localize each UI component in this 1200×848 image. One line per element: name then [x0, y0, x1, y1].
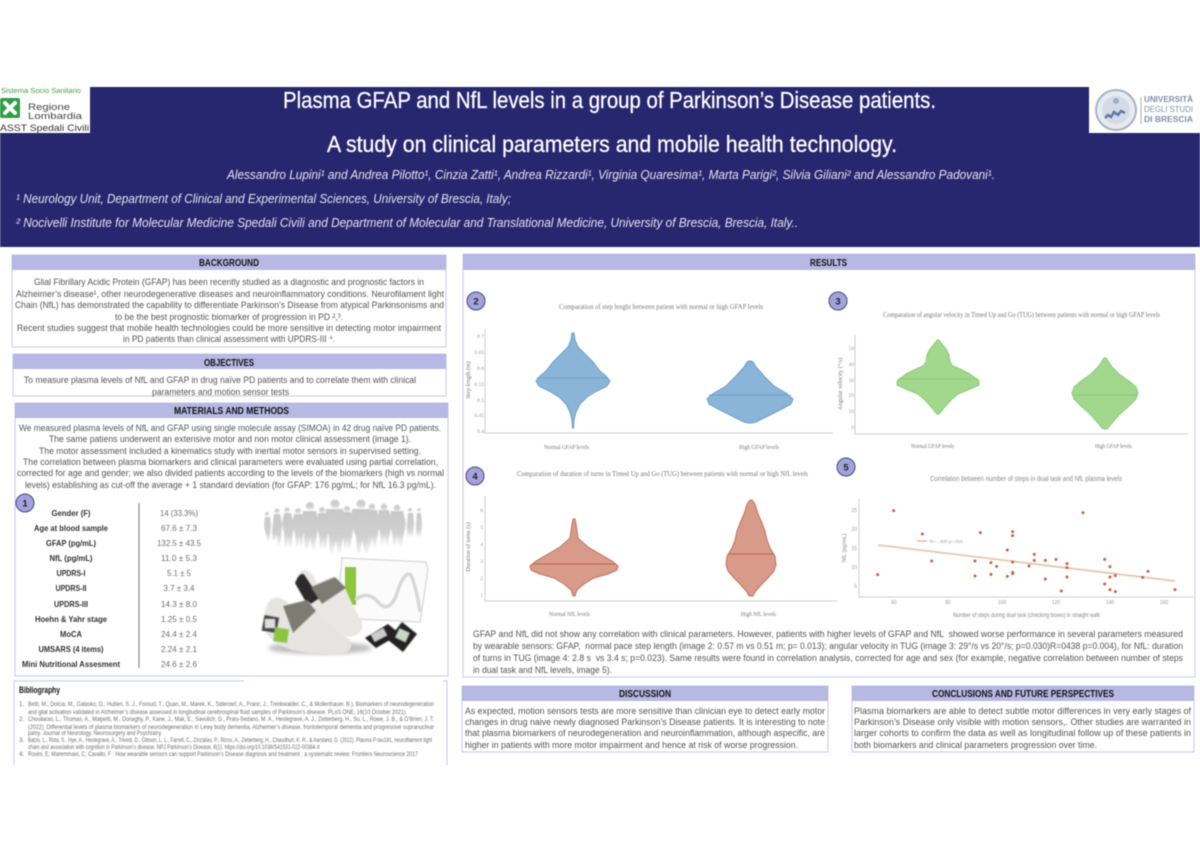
chart 4: duration of turns violin plot: 1: [480, 593, 483, 599]
violin: normal NfL: [530, 519, 618, 596]
chart 5: correlation scatter plot: 10: [851, 565, 857, 571]
clinical table: 3.7 ± 3.4: [164, 584, 195, 593]
badge 2: [467, 292, 485, 310]
chart 2: step length violin plot: 0.4: [477, 429, 484, 435]
logo: Università degli Studi di Brescia: DI BRESCIA: [1144, 115, 1193, 124]
background text: Chain (NfL) has demonstrated the capability to differentiate Parkinson’s Disease from atypical Parkinsonisms and: [15, 300, 444, 311]
panel: discussion: [462, 686, 828, 752]
chart 4: duration of turns violin plot: Normal NfL levels: [549, 611, 591, 618]
chart 3: angular velocity violin plot: 30: [848, 378, 854, 384]
chart 2: step length violin plot: Normal GFAP levels: [544, 445, 590, 451]
discussion text: higher in patients with more motor impairment and hence at risk of worse progression.: [465, 740, 798, 751]
illustration: crowd, wearable sensors and shoes: [262, 500, 428, 654]
clinical table: UMSARS (4 items): [38, 645, 104, 654]
references: (2022). Differential levels of plasma biomarkers of neurodegeneration in Lewy body dementia, Alzheimer’s disease, frontotemporal dementia and progressive supranuclear: [28, 724, 435, 731]
badge 4: 4: [472, 472, 478, 482]
chart 2: step length violin plot: High GFAP levels: [739, 445, 780, 451]
background text: Recent studies suggest that mobile health technologies could be more sensitive in detecting motor impairment: [17, 323, 441, 334]
badge 1: [16, 494, 34, 512]
chart 2: step length violin plot: [465, 292, 833, 451]
results text: in dual task and NfL levels, image 5).: [473, 665, 612, 676]
clinical table: 14.3 ± 8.0: [161, 600, 197, 609]
chart 5: correlation scatter plot: [837, 458, 1193, 619]
clinical table: 24.4 ± 2.4: [161, 630, 197, 639]
background text: Alzheimer’s disease¹, other neurodegenerative diseases and neuroinflammatory conditions. Neurofilament light: [16, 289, 444, 300]
references: 2.: [19, 716, 25, 723]
chart 3: angular velocity violin plot: 40: [848, 362, 854, 368]
chart 2: step length violin plot: Comparation of step lenght between patient with normal or high GFAP levels: [559, 302, 763, 311]
references: Batzu, L., Rota, S., Hye, A., Heslegrave, A., Trivedi, D., Gibson, L. L., Farrell, C., Zinzalias, P., Rizos, A., Zetterberg, H., Chaudhuri, K. R., & Aarsland, D. (2022). Plasma P-tau181, neurofilament light: [28, 737, 432, 744]
chart 4: duration of turns violin plot: 3: [480, 559, 483, 565]
logo: Regione Lombardia: [0, 87, 90, 134]
heading: results: RESULTS: [810, 258, 847, 269]
heading: materials and methods: MATERIALS AND METHODS: [174, 406, 289, 417]
icon: rear shoe with sensor: [295, 570, 362, 637]
clinical table: Gender (F): [52, 509, 91, 518]
chart 3: angular velocity violin plot: 10: [848, 409, 854, 415]
chart 2: step length violin plot: 0.6: [477, 366, 484, 372]
background text: Glial Fibrillary Acidic Protein (GFAP) has been recently studied as a diagnostic and prognostic factors in: [34, 277, 424, 288]
clinical table: 67.6 ± 7.3: [161, 524, 197, 533]
chart 5: correlation scatter plot: 25: [851, 508, 857, 514]
background text: to be the best prognostic biomarker of progression in PD ²,³.: [115, 312, 343, 323]
references: 4.: [19, 751, 25, 758]
chart 5: correlation scatter plot: 15: [851, 546, 857, 552]
clinical table: 11.0 ± 5.3: [161, 554, 197, 563]
chart 2: step length violin plot: 0.5: [477, 398, 484, 404]
icon: front shoe with sensor: [262, 598, 351, 654]
objectives text: [24, 375, 416, 398]
violin: normal GFAP: [897, 340, 979, 414]
references: and glial activation validated in Alzheimer’s disease assessed in longitudinal cerebrospinal fluid samples of Parkinson’s disease. PLoS ONE, 16(10 October 2021).: [28, 709, 407, 716]
affiliations: ² Nocivelli Institute for Molecular Medicine Spedali Civili and Department of Molecular and Translational Medicine, University of Brescia, Brescia, Italy..: [16, 216, 798, 230]
objectives text: parameters and motion sensor tests: [152, 387, 289, 398]
logo: Università degli Studi di Brescia: [1089, 87, 1200, 133]
chart 4: duration of turns violin plot: 4: [480, 542, 483, 548]
discussion text: [465, 706, 826, 751]
badge 4: [466, 467, 484, 485]
logo: Regione Lombardia: Sistema Socio Sanitario: [1, 88, 81, 95]
chart screen: [336, 558, 428, 622]
references: Chouliaras, L., Thomas, A., Malpetti, M., Donaghy, P., Kane, J., Mak, E., Savulich, G., Prats-Sedano, M. A., Heslegrave, A. J., Zetterberg, H., Su, L., Rowe, J. B., & O’Brien, J. T.: [28, 716, 434, 723]
heading: discussion: DISCUSSION: [619, 689, 671, 700]
badge 3: [829, 292, 847, 310]
clinical table: MoCA: [60, 630, 82, 639]
references: 1.: [19, 701, 25, 708]
chart 4: duration of turns violin plot: Duration of turns (s): [465, 522, 472, 572]
clinical table: NfL (pg/mL): [50, 554, 93, 563]
chart 5: correlation scatter plot: 80: [945, 600, 951, 606]
clinical table: 5.1 ± 5: [167, 569, 191, 578]
clinical table: UPDRS-III: [54, 600, 88, 609]
references: [19, 701, 435, 758]
header banner: [0, 87, 1200, 247]
heading: conclusions: CONCLUSIONS AND FUTURE PERSPECTIVES: [932, 689, 1114, 700]
chart 2: step length violin plot: 0.7: [477, 334, 484, 340]
chart 2: step length violin plot: 0.55: [474, 382, 484, 388]
heading: objectives: OBJECTIVES: [204, 358, 254, 369]
references: Rovini, E; Maremmani, C; Cavallo, F . How wearable sensors can support Parkinson’s Disease diagnosis and treatment : a systematic review; Frontiers Neuroscience 2017: [28, 751, 418, 758]
badge 5: 5: [843, 462, 849, 474]
heading: background: BACKGROUND: [199, 258, 259, 269]
clinical table: 1.25 ± 0.5: [161, 615, 197, 624]
chart 5: correlation scatter plot: 160: [1160, 600, 1168, 606]
chart 3: angular velocity violin plot: 0: [851, 425, 854, 431]
chart 5: correlation scatter plot: 120: [1052, 600, 1060, 606]
badge 3: 3: [835, 296, 841, 308]
title: [283, 87, 936, 157]
logo: Regione Lombardia: ASST Spedali Civili: [0, 123, 89, 134]
references: Betti, M., Dolcia, M., Galasko, D., Hutten, S. J., Foroud, T., Quan, M., Marek, K., Siderowf, A., Franz, J., Trenkwalder, C., & Mollenhauer, B.). Biomarkers of neurodegeneration: [28, 701, 434, 708]
conclusions text: [854, 706, 1191, 751]
chart 5: correlation scatter plot: 100: [998, 600, 1006, 606]
badge 1: 1: [22, 498, 28, 510]
badge 5: [837, 458, 855, 476]
background text: in PD patients than clinical assessment with UPDRS-III ⁴.: [123, 334, 335, 345]
chart 4: duration of turns violin plot: [465, 467, 837, 618]
logo: Regione Lombardia: Lombardia: [28, 111, 83, 122]
violin: high NfL: [726, 500, 776, 596]
chart 3: angular velocity violin plot: [829, 292, 1188, 450]
chart 3: angular velocity violin plot: Normal GFAP levels: [911, 444, 955, 450]
objectives text: To measure plasma levels of NfL and GFAP in drug naïve PD patients and to correlate them with clinical: [24, 375, 416, 386]
chart 5: correlation scatter plot: 140: [1106, 600, 1114, 606]
chart 2: step length violin plot: 0.65: [474, 350, 484, 356]
badge 2: 2: [473, 296, 479, 308]
violin: high GFAP: [707, 361, 793, 423]
panel: materials and methods: [15, 403, 448, 676]
chart 2: step length violin plot: 0.45: [474, 413, 484, 419]
clinical table: 2.24 ± 2.1: [161, 645, 197, 654]
chart 5: correlation scatter plot: Number of steps during dual task (checking boxes) in straight walk: [953, 613, 1101, 619]
violin: normal GFAP: [536, 333, 610, 428]
background text: [15, 277, 444, 345]
panel: bibliography: [14, 681, 447, 765]
clinical table: 132.5 ± 43.5: [157, 539, 201, 548]
chart 3: angular velocity violin plot: High GFAP levels: [1095, 444, 1133, 450]
authors: Alessandro Lupini¹ and Andrea Pilotto¹, Cinzia Zatti¹, Andrea Rizzardi¹, Virginia Quaresima¹, Marta Parigi², Silvia Giliani² and Alessandro Padovani¹.: [226, 168, 995, 182]
clinical table: 14 (33.3%): [160, 509, 198, 518]
chart 3: angular velocity violin plot: Angular velocity (°/s): [837, 358, 844, 410]
chart 5: correlation scatter plot: 60: [891, 600, 897, 606]
chart 3: angular velocity violin plot: 50: [848, 346, 854, 352]
clinical table: 24.6 ± 2.6: [161, 660, 197, 669]
affiliations: ¹ Neurology Unit, Department of Clinical and Experimental Sciences, University of Brescia, Italy;: [16, 192, 511, 206]
legend: R= -.400 p=.010: [930, 539, 963, 544]
references: palsy. Journal of Neurology, Neurosurgery and Psychiatry.: [28, 730, 162, 737]
panel: background: [12, 255, 446, 347]
logo: Università degli Studi di Brescia: DEGLI STUDI: [1144, 105, 1193, 114]
chart 4: duration of turns violin plot: 6: [480, 508, 483, 514]
title: Plasma GFAP and NfL levels in a group of Parkinson’s Disease patients.: [283, 87, 936, 113]
discussion text: changes in drug naive newly diagnosed Parkinson’s Disease patients. It is interesting to note: [465, 717, 825, 728]
methods text: The same patiens underwent an extensive motor and non motor clinical assessment (image 1).: [49, 434, 411, 445]
chart 5: correlation scatter plot: 20: [851, 527, 857, 533]
clinical table: UPDRS-I: [56, 569, 86, 578]
affiliations: [16, 192, 798, 230]
discussion text: As expected, motion sensors tests are more sensitive than clinician eye to detect early motor: [465, 706, 826, 717]
references: 3.: [19, 737, 25, 744]
icon: sensor devices: [365, 622, 417, 652]
shoe ground shadow: [268, 642, 372, 654]
methods text: levels) establishing as cut-off the average + 1 standard deviation (for GFAP: 176 pg/mL; for NfL 16.3 pg/mL).: [25, 480, 436, 491]
panel: results: [463, 254, 1195, 677]
results text: [473, 629, 1183, 676]
methods text: corrected for age and gender; we also divided patients according to the levels of the biomarkers (high vs normal: [17, 468, 444, 479]
chart 4: duration of turns violin plot: High NfL levels: [741, 611, 777, 618]
methods text: The motor assessment included a kinematics study with inertial motor sensors in supervised setting.: [39, 446, 421, 457]
violin: high GFAP: [1072, 358, 1138, 429]
title: A study on clinical parameters and mobile health technology.: [327, 131, 897, 157]
clinical table: Mini Nutritional Assesment: [22, 660, 120, 669]
chart 5: correlation scatter plot: Correlation between number of steps in dual task and NfL plasma levels: [930, 476, 1122, 483]
logo: Università degli Studi di Brescia: UNIVERSITÀ: [1144, 95, 1193, 104]
chart 5: correlation scatter plot: NfL (pg/mL): [842, 533, 848, 562]
panel: conclusions and future perspectives: [852, 686, 1194, 752]
clinical table: Hoehn & Yahr stage: [35, 615, 107, 624]
scatter points: [876, 509, 1176, 593]
heading: bibliography: Bibliography: [19, 685, 60, 695]
logo: Regione Lombardia: Regione: [28, 102, 70, 113]
chart 4: duration of turns violin plot: 5: [480, 525, 483, 531]
chart 5: correlation scatter plot: 5: [854, 584, 857, 590]
references: chain and association with cognition in Parkinson’s disease. NPJ Parkinson’s Disease, 8(1). https://doi.org/10.1038/S41531-022-00384-X: [28, 744, 321, 751]
icon: crowd silhouettes: [264, 500, 422, 553]
clinical table: UPDRS-II: [56, 584, 86, 593]
chart 3: angular velocity violin plot: 20: [848, 393, 854, 399]
conclusions text: both biomarkers and clinical parameters progression over time.: [854, 740, 1097, 751]
panel: objectives: [13, 354, 446, 398]
clinical table: [22, 503, 201, 669]
clinical table: GFAP (pg/mL): [46, 539, 96, 548]
chart 4: duration of turns violin plot: 2: [480, 576, 483, 582]
methods text: We measured plasma levels of NfL and GFAP using single molecule assay (SIMOA) in 42 drug naïve PD patients.: [19, 423, 441, 434]
discussion text: that plasma biomarkers of neurodegeneration and neuroinflammation, although aspecific, are: [465, 728, 825, 739]
methods text: The correlation between plasma biomarkers and clinical parameters were evaluated using partial correlation,: [23, 457, 438, 468]
chart 4: duration of turns violin plot: Comparation of duration of turns in Timed Up and Go (TUG) between patients with normal or high NfL levels: [517, 469, 808, 478]
chart 2: step length violin plot: Step length (m): [465, 361, 472, 399]
clinical table: Age at blood sample: [34, 524, 108, 533]
methods text: [17, 423, 444, 491]
